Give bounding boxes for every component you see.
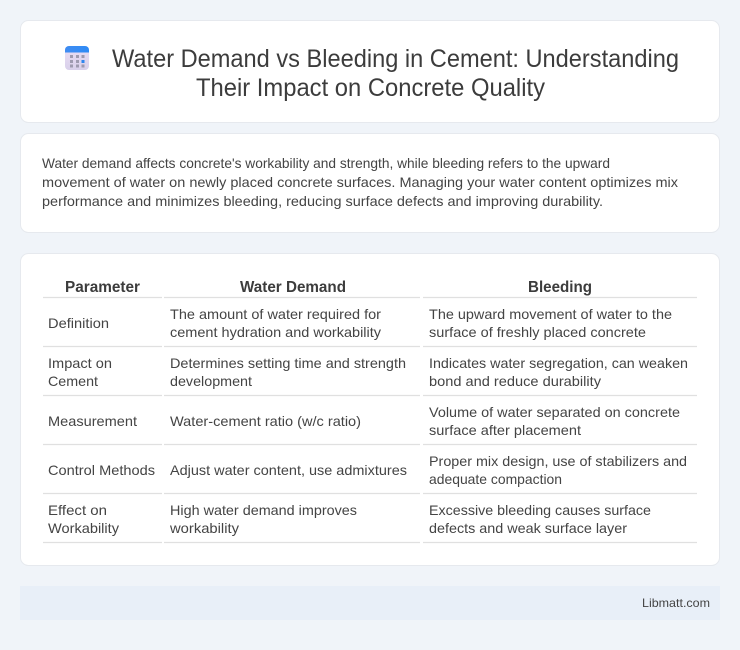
title (112, 45, 679, 102)
row: definition: Definition (48, 315, 109, 331)
table header row (43, 279, 697, 298)
row: impact on cement: Determines setting time and strength (170, 355, 406, 371)
row: effect on workability: Effect on (48, 502, 107, 518)
table header row: Parameter (65, 279, 140, 296)
footer bar (20, 586, 720, 620)
footer bar: Libmatt.com (642, 596, 710, 610)
row: impact on cement: Cement (48, 373, 98, 389)
row: effect on workability: High water demand improves (170, 502, 357, 518)
row: effect on workability: workability (169, 520, 239, 536)
row: control methods (43, 453, 697, 494)
panel: intro text: performance and minimizes bleeding, reducing surface defects and improving durability. (42, 193, 603, 209)
panel: intro text (20, 134, 720, 232)
row: control methods: Proper mix design, use of stabilizers and (429, 453, 687, 469)
row: definition: surface of freshly placed concrete (429, 324, 646, 340)
table header row: Bleeding (528, 279, 592, 296)
row: impact on cement: Indicates water segregation, can weaken (429, 355, 688, 371)
panel: intro text: movement of water on newly placed concrete surfaces. Managing your water content optimizes mix (42, 174, 678, 190)
row: measurement: surface after placement (429, 422, 581, 438)
row: measurement: Water-cement ratio (w/c ratio) (170, 413, 361, 429)
table header row: Water Demand (240, 279, 346, 296)
row: definition: The upward movement of water to the (429, 306, 672, 322)
row: impact on cement: development (170, 373, 252, 389)
row: definition: The amount of water required for (170, 306, 381, 322)
row: effect on workability: Excessive bleeding causes surface (429, 502, 651, 518)
icon: calendar (65, 46, 89, 70)
row: control methods: adequate compaction (429, 471, 562, 487)
row: effect on workability (43, 502, 697, 542)
row: measurement: Measurement (48, 413, 137, 429)
title: Their Impact on Concrete Quality (196, 74, 545, 102)
row: effect on workability: defects and weak surface layer (429, 520, 627, 536)
row: measurement: Volume of water separated on concrete (429, 404, 680, 420)
row: definition (43, 306, 697, 346)
panel: intro text: Water demand affects concrete's workability and strength, while bleeding refers to the upward (42, 155, 610, 171)
row: effect on workability: Workability (48, 520, 119, 536)
row: impact on cement: Impact on (48, 355, 112, 371)
row: impact on cement: bond and reduce durability (429, 373, 601, 389)
row: control methods: Control Methods (48, 462, 155, 478)
row: impact on cement (43, 355, 697, 396)
row: definition: cement hydration and workability (170, 324, 381, 340)
row: control methods: Adjust water content, use admixtures (170, 462, 407, 478)
title: Water Demand vs Bleeding in Cement: Understanding (112, 45, 679, 73)
panel: comparison table (20, 254, 720, 566)
row: measurement (43, 404, 697, 444)
panel: header card (20, 20, 720, 122)
